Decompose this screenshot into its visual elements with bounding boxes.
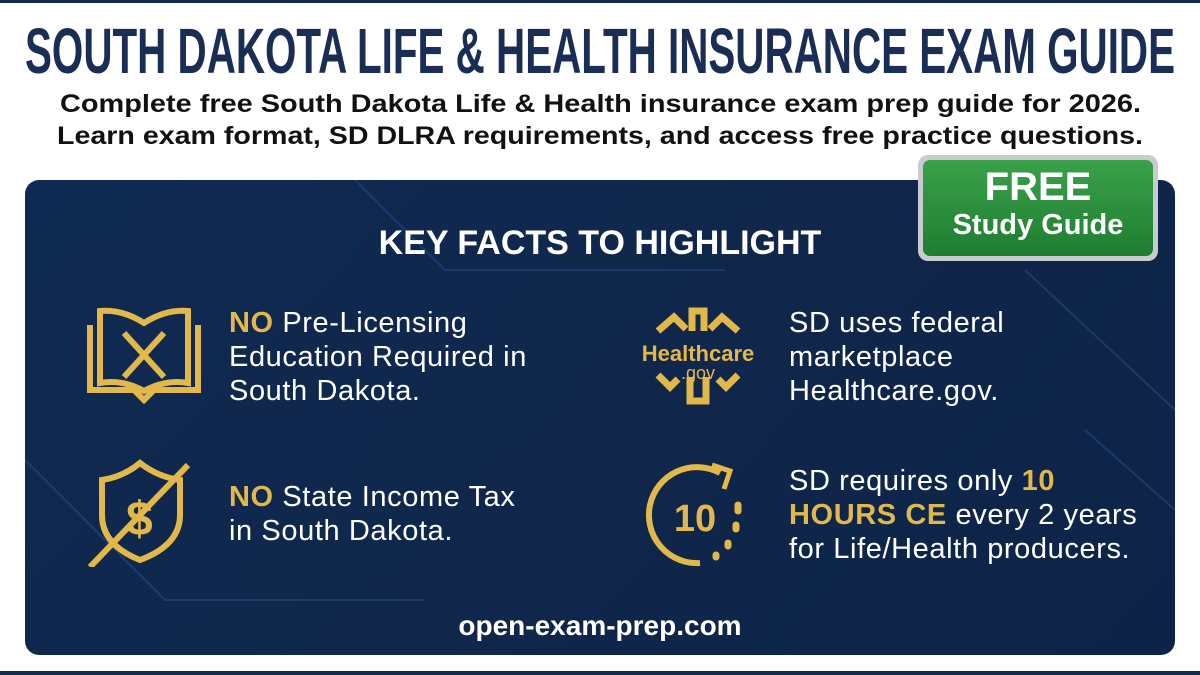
icon: healthcare.gov: Healthcare xyxy=(642,341,754,366)
text: no income tax xyxy=(229,481,516,547)
icon: 10 hour clock xyxy=(646,462,742,566)
text: no income tax: in South Dakota. xyxy=(229,515,453,547)
text: no pre-licensing xyxy=(229,307,527,407)
badge: free study guide xyxy=(918,155,1158,261)
text: no pre-licensing: Education Required in xyxy=(229,341,527,373)
text: ce hours xyxy=(789,465,1137,565)
text: federal marketplace: SD uses federal xyxy=(789,307,1004,339)
subtitle xyxy=(57,90,1143,150)
badge: free study guide: FREE xyxy=(985,165,1091,209)
text: federal marketplace xyxy=(789,307,1004,407)
text: no pre-licensing: South Dakota. xyxy=(229,375,421,407)
icon: healthcare.gov xyxy=(642,308,754,404)
text: no pre-licensing: NO Pre-Licensing xyxy=(229,307,467,339)
text: ce hours: for Life/Health producers. xyxy=(789,533,1130,565)
badge: free study guide: Study Guide xyxy=(953,209,1123,241)
text: ce hours: SD requires only 10 xyxy=(789,465,1055,497)
subtitle: Learn exam format, SD DLRA requirements, and access free practice questions. xyxy=(57,122,1143,150)
text: federal marketplace: marketplace xyxy=(789,341,954,373)
heading: KEY FACTS TO HIGHLIGHT xyxy=(379,224,821,262)
text: ce hours: HOURS CE every 2 years xyxy=(789,499,1137,531)
icon: healthcare.gov: .gov xyxy=(681,363,715,383)
icon: shield no tax: $ xyxy=(126,493,153,546)
icon: 10 hour clock: 10 xyxy=(674,498,716,540)
subtitle: Complete free South Dakota Life & Health insurance exam prep guide for 2026. xyxy=(60,90,1141,118)
text: federal marketplace: Healthcare.gov. xyxy=(789,375,999,407)
icon: book with x xyxy=(87,308,201,404)
icon: shield no tax xyxy=(88,459,190,567)
panel: key facts xyxy=(25,180,1175,655)
footer url: open-exam-prep.com xyxy=(458,610,742,641)
text: no income tax: NO State Income Tax xyxy=(229,481,516,513)
